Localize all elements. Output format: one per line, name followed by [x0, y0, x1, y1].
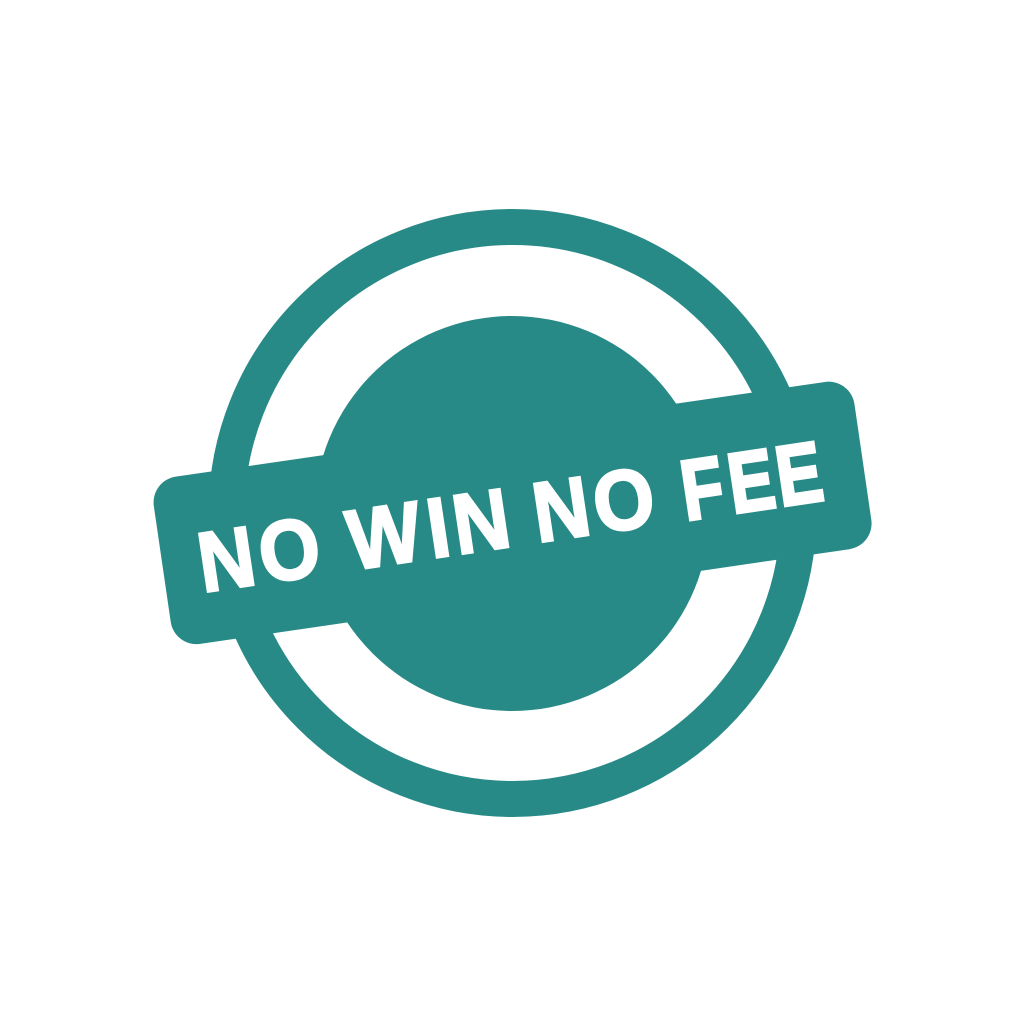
banner text: FEE	[675, 424, 829, 539]
outer ring	[226, 227, 798, 799]
banner text: NO	[192, 499, 326, 611]
banner text	[192, 424, 829, 611]
banner text: WIN	[341, 471, 516, 589]
banner text: NO	[526, 449, 661, 561]
banner	[150, 378, 875, 648]
inner disc	[314, 316, 710, 711]
